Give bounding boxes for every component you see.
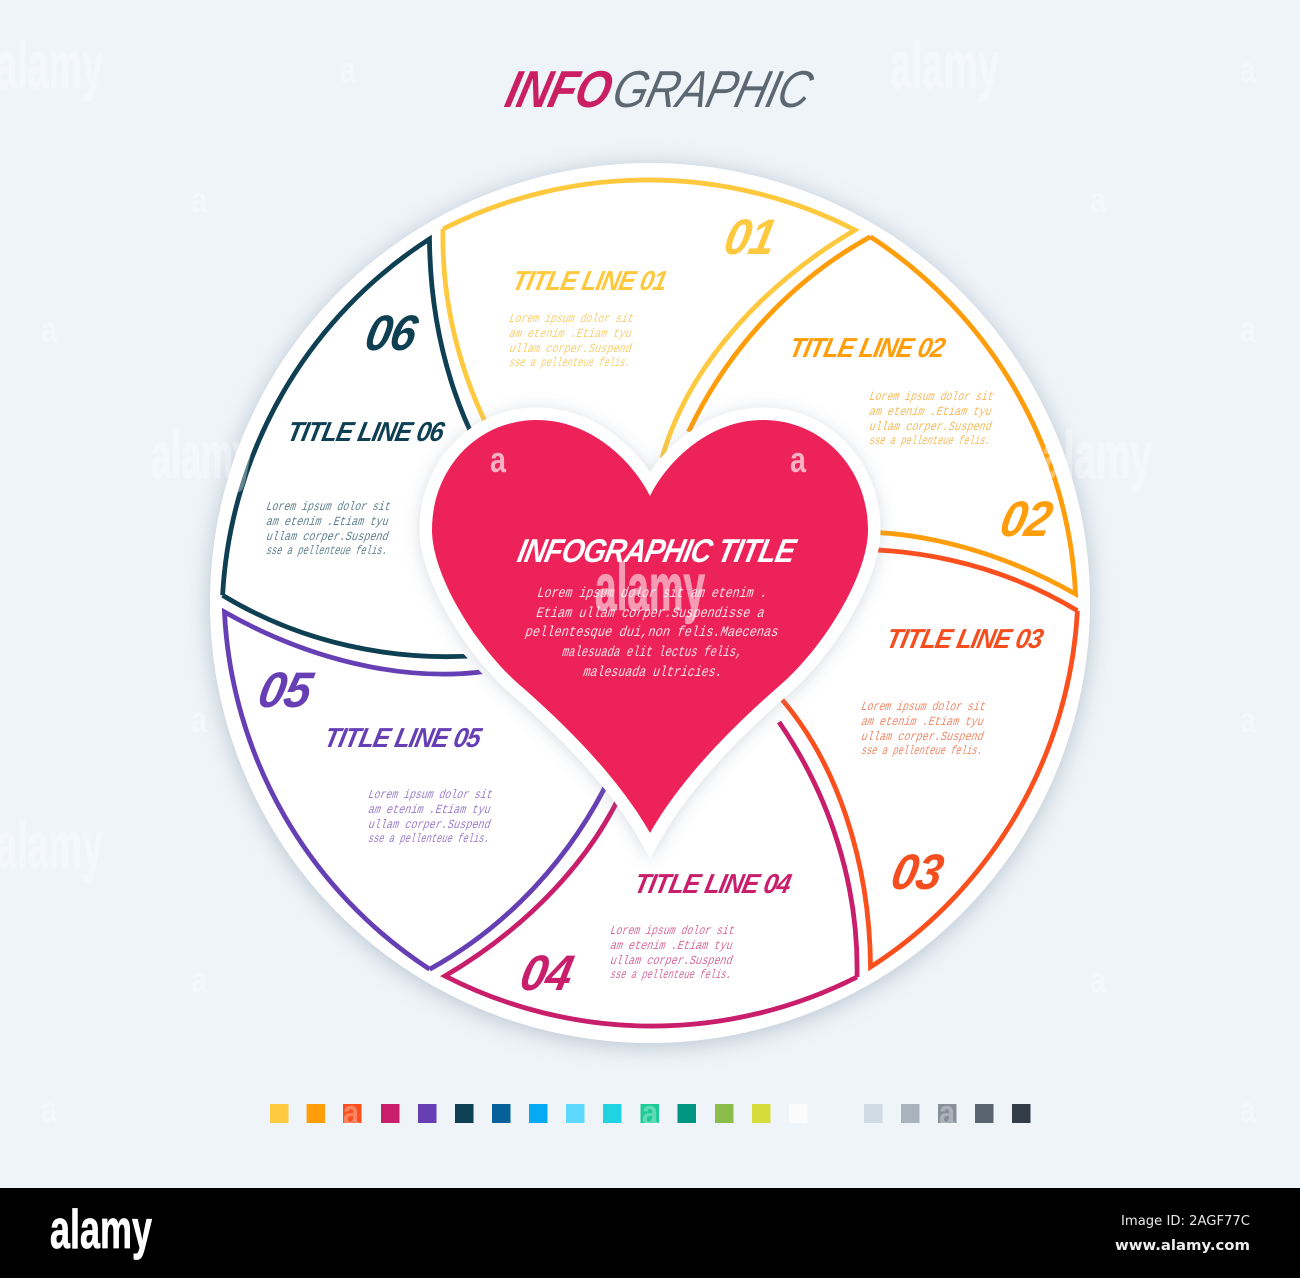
image id and url (1115, 1214, 1250, 1254)
segment 02 outline (650, 212, 1119, 721)
watermarks: a (1240, 1089, 1257, 1130)
segment 06 outline (180, 214, 649, 723)
watermarks: alamy (151, 418, 253, 492)
segment 03 outline (651, 483, 1120, 992)
watermarks: alamy (1042, 418, 1152, 492)
watermarks: a (490, 439, 507, 480)
segment 03 body text: sse a pellenteue felis. (860, 744, 984, 758)
segment 05 (181, 485, 650, 994)
segment 02 number: 02 (996, 491, 1057, 547)
white circle panel (210, 163, 1090, 1043)
segment 05 body text: am etenim .Etiam tyu (367, 803, 492, 817)
segment 01 body text: ullam corper.Suspend (508, 342, 633, 356)
header title: INFO (500, 61, 618, 119)
segment 01 body text (508, 312, 635, 370)
watermarks: a (343, 1092, 360, 1133)
watermarks: a (1240, 699, 1257, 740)
segment 04 body text: ullam corper.Suspend (609, 954, 734, 968)
watermarks: a (1240, 309, 1257, 350)
segment 01 outline (443, 180, 855, 484)
header title (500, 61, 819, 119)
watermarks: a (939, 1092, 956, 1133)
segment 03 body text: ullam corper.Suspend (860, 730, 985, 744)
watermarks: a (340, 49, 357, 90)
segment 05 body text: ullam corper.Suspend (367, 818, 492, 832)
heart body text: Etiam ullam corper.Suspendisse a (535, 606, 766, 622)
segment 06 body text: am etenim .Etiam tyu (265, 515, 390, 529)
heart body text: malesuada ultricies. (582, 665, 724, 681)
header title: GRAPHIC (607, 61, 819, 119)
watermarks: a (191, 179, 208, 220)
watermarks: a (191, 699, 208, 740)
segment 04 body text: Lorem ipsum dolor sit (609, 924, 736, 938)
segment 06 (180, 214, 649, 723)
heart body text: pellentesque dui,non felis.Maecenas (523, 625, 780, 641)
segment 01 title: TITLE LINE 01 (510, 265, 669, 296)
segment 04 outline (445, 722, 857, 1026)
segment 03 body text: Lorem ipsum dolor sit (860, 700, 987, 714)
segment 05 body text (367, 788, 494, 846)
bottom black band (0, 1188, 1300, 1278)
watermarks: a (790, 439, 807, 480)
segment 05 number: 05 (254, 662, 318, 718)
watermarks: a (191, 959, 208, 1000)
segment 05 title: TITLE LINE 05 (322, 722, 485, 753)
segment 05 outline (181, 485, 650, 994)
segment 03 title: TITLE LINE 03 (884, 623, 1047, 654)
segment 06 body text: Lorem ipsum dolor sit (265, 500, 392, 514)
watermarks: alamy (595, 550, 705, 624)
image id and url: Image ID: 2AGF77C (1121, 1214, 1250, 1229)
heart title: INFOGRAPHIC TITLE (514, 533, 800, 570)
watermarks: a (41, 1089, 58, 1130)
segment 04 (445, 722, 857, 1026)
watermarks: a (642, 1092, 659, 1133)
watermarks: a (1090, 179, 1107, 220)
segment 01 number: 01 (720, 209, 781, 265)
segment 04 title: TITLE LINE 04 (632, 868, 794, 899)
segment 02 title: TITLE LINE 02 (787, 332, 949, 363)
segment 04 number: 04 (516, 945, 578, 1001)
central heart (432, 420, 868, 833)
segment 04 body text: sse a pellenteue felis. (609, 968, 733, 982)
segment 02 (650, 212, 1119, 721)
segment 02 body text: am etenim .Etiam tyu (868, 405, 993, 419)
segment 02 body text: sse a pellenteue felis. (868, 434, 992, 448)
segment 03 body text (860, 700, 987, 758)
alamy logo: alamy (50, 1198, 152, 1260)
segment 04 body text: am etenim .Etiam tyu (609, 939, 734, 953)
watermarks: a (1090, 959, 1107, 1000)
watermarks: alamy (0, 808, 103, 882)
segment 02 body text (868, 390, 995, 448)
segment 01 body text: sse a pellenteue felis. (508, 356, 632, 370)
image id and url: www.alamy.com (1115, 1238, 1250, 1254)
segment 01 body text: am etenim .Etiam tyu (508, 327, 633, 341)
segment 04 body text (609, 924, 736, 982)
segment 03 body text: am etenim .Etiam tyu (860, 715, 985, 729)
segment 01 body text: Lorem ipsum dolor sit (508, 312, 635, 326)
colour swatches (270, 1104, 1030, 1123)
heart body text: malesuada elit lectus felis, (561, 645, 744, 661)
heart shape (432, 420, 868, 833)
watermarks: a (1240, 49, 1257, 90)
segment 03 number: 03 (887, 844, 948, 900)
segment 02 body text: Lorem ipsum dolor sit (868, 390, 995, 404)
segment 02 body text: ullam corper.Suspend (868, 420, 993, 434)
heart body text (523, 586, 780, 681)
segment 06 body text: ullam corper.Suspend (265, 530, 390, 544)
watermarks: alamy (0, 28, 103, 102)
segment 06 body text (265, 500, 392, 558)
segment 06 number: 06 (361, 305, 423, 361)
segment 06 body text: sse a pellenteue felis. (265, 544, 389, 558)
segment 03 (651, 483, 1120, 992)
heart body text: Lorem ipsum dolor sit am etenim . (536, 586, 769, 602)
segment 05 body text: Lorem ipsum dolor sit (367, 788, 494, 802)
segment 06 title: TITLE LINE 06 (285, 416, 448, 447)
segment 01 (443, 180, 855, 484)
watermarks: alamy (890, 28, 999, 102)
segment 05 body text: sse a pellenteue felis. (367, 832, 491, 846)
watermarks: a (41, 309, 58, 350)
